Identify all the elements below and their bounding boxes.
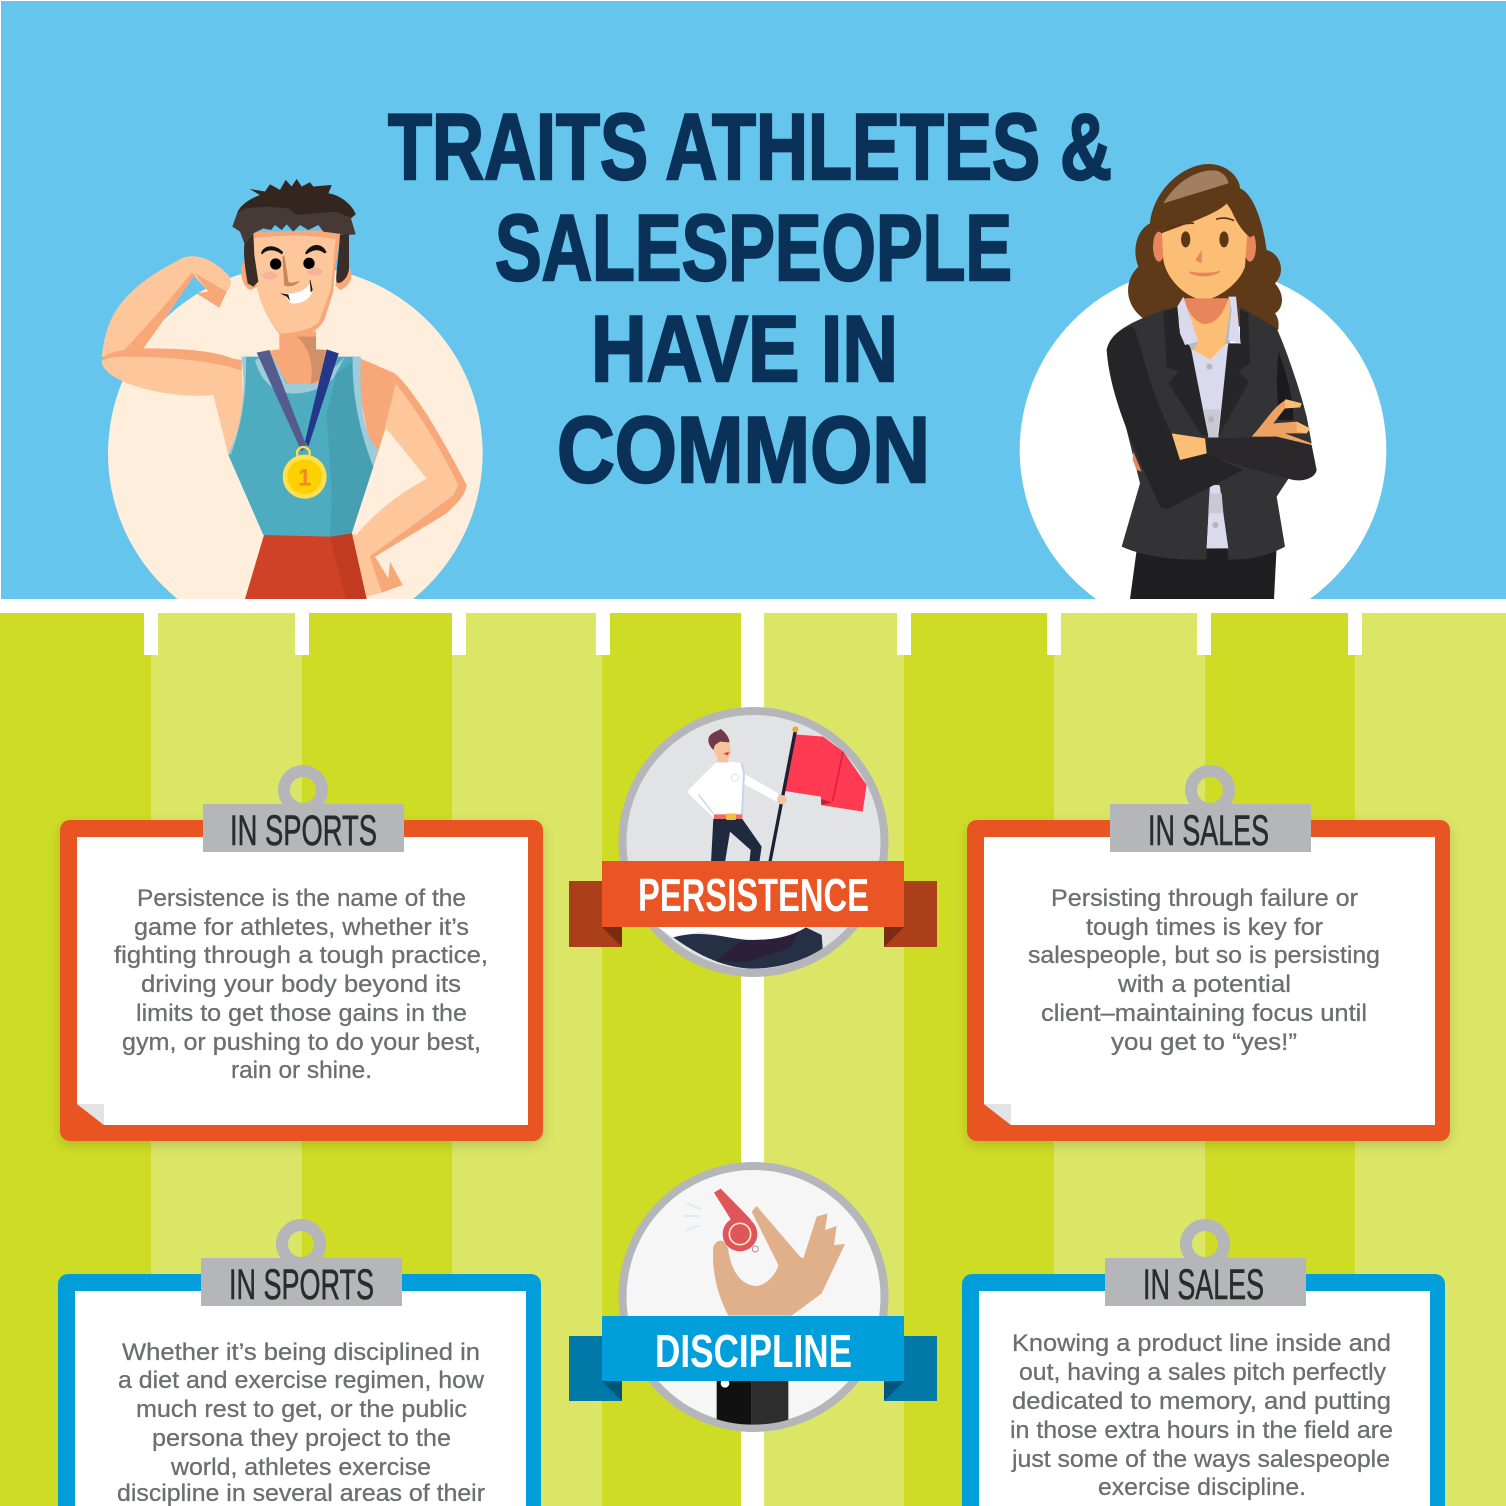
body text: Persistence is the name of the (137, 885, 466, 912)
athlete gold medal (283, 447, 327, 499)
athlete neck (269, 332, 327, 384)
ribbon tails (569, 881, 937, 947)
body text: persona they project to the (152, 1425, 451, 1452)
title: COMMON (557, 397, 930, 502)
sleeve (717, 1379, 788, 1425)
title (388, 94, 1112, 502)
body text: Persisting through failure or (1051, 885, 1358, 912)
face (252, 230, 342, 336)
icon: hand holding whistle (684, 1189, 845, 1425)
badge: persistence (569, 711, 937, 973)
card paper (75, 1291, 526, 1506)
clip tag (201, 1219, 402, 1309)
body text (1028, 885, 1380, 1056)
athlete shorts (245, 533, 367, 599)
body text: world, athletes exercise (170, 1454, 431, 1481)
flag (785, 734, 867, 812)
ribbon tails (569, 1336, 937, 1401)
panel: discipline in sports (58, 1219, 541, 1506)
body text (114, 885, 488, 1084)
badge: discipline (569, 1166, 937, 1428)
athlete raised arm (102, 256, 243, 455)
panel: persistence in sales (967, 765, 1450, 1141)
businesswoman lower shirt (1207, 485, 1228, 548)
businesswoman jacket (1107, 307, 1312, 560)
body text: gym, or pushing to do your best, (122, 1029, 481, 1056)
title: HAVE IN (591, 296, 898, 401)
title: TRAITS ATHLETES & (388, 94, 1112, 199)
paper fold (77, 1104, 104, 1125)
clip tag: IN SALES (1148, 807, 1269, 855)
whistle (714, 1189, 758, 1252)
clip tag: IN SPORTS (229, 1261, 374, 1309)
body text: game for athletes, whether it’s (134, 914, 469, 941)
body text: dedicated to memory, and putting (1012, 1388, 1391, 1415)
ribbon (602, 1316, 904, 1381)
body text: Whether it’s being disciplined in (122, 1339, 480, 1366)
body text: client–maintaining focus until (1041, 1000, 1367, 1027)
striped field background (0, 613, 1506, 1506)
clip tag: IN SALES (1143, 1261, 1264, 1309)
shirt (1191, 342, 1228, 437)
card frame (60, 820, 543, 1141)
paper fold (984, 1104, 1011, 1125)
card paper (979, 1291, 1430, 1506)
flag pole (768, 726, 798, 863)
athlete tank top (228, 352, 378, 537)
businesswoman skirt (1130, 547, 1277, 599)
trousers (711, 819, 762, 862)
nose (282, 255, 300, 286)
shirt (688, 761, 778, 818)
belt (714, 814, 742, 819)
body text (117, 1339, 485, 1506)
cheeks (262, 272, 278, 280)
businesswoman back hair (1128, 164, 1282, 330)
ribbon (602, 861, 904, 927)
lapels (1163, 307, 1208, 436)
body text: a diet and exercise regimen, how (118, 1367, 484, 1394)
badge circle (622, 1166, 884, 1428)
athlete backdrop circle (108, 270, 483, 599)
clip tag: IN SPORTS (230, 807, 377, 855)
ribbon label: PERSISTENCE (638, 869, 869, 921)
athlete right arm (352, 358, 467, 597)
athlete gold medal: 1 (298, 464, 311, 491)
eyes (270, 258, 281, 270)
body text: in those extra hours in the field are (1010, 1417, 1393, 1444)
clip tag (1110, 765, 1311, 855)
athlete medal ribbons (257, 349, 339, 452)
hand (713, 1206, 845, 1316)
panel: persistence in sports (60, 765, 543, 1141)
body text: much rest to get, or the public (136, 1396, 467, 1423)
card paper (984, 837, 1435, 1125)
title: SALESPEOPLE (495, 195, 1012, 300)
hand (777, 795, 787, 804)
businesswoman upper torso (1163, 297, 1293, 437)
body text: you get to “yes!” (1111, 1029, 1297, 1056)
card frame (967, 820, 1450, 1141)
body text: Knowing a product line inside and (1012, 1330, 1391, 1357)
card frame (58, 1274, 541, 1506)
panel: discipline in sales (962, 1219, 1445, 1506)
ears (241, 260, 258, 290)
body text: tough times is key for (1086, 914, 1323, 941)
card paper (77, 837, 528, 1125)
body text: fighting through a tough practice, (114, 942, 488, 969)
header background (1, 1, 1506, 599)
body text: with a potential (1117, 971, 1291, 998)
buttons (1206, 364, 1212, 370)
collar shadow (1225, 300, 1232, 344)
ribbon label: DISCIPLINE (655, 1325, 852, 1377)
man (688, 729, 787, 862)
body text: limits to get those gains in the (136, 1000, 467, 1027)
badge circle (622, 711, 884, 973)
icon: man planting flag (657, 726, 867, 969)
hair (232, 179, 356, 243)
smile (285, 282, 312, 303)
body text: driving your body beyond its (141, 971, 461, 998)
businesswoman face (1152, 170, 1263, 300)
sleeve shadow (1277, 352, 1293, 420)
body text: exercise discipline. (1098, 1474, 1306, 1501)
body text: rain or shine. (231, 1057, 372, 1084)
eyebrows (261, 246, 283, 254)
card frame (962, 1274, 1445, 1506)
collar (1177, 297, 1198, 345)
illustration: businesswoman (1020, 164, 1386, 633)
clip tag (1105, 1219, 1306, 1309)
body text (1010, 1330, 1393, 1501)
sound lines (684, 1203, 701, 1231)
illustration: athlete (102, 179, 483, 641)
neck (1184, 298, 1232, 360)
body text: salespeople, but so is persisting (1028, 942, 1380, 969)
athlete head (232, 179, 356, 336)
clip tag (203, 765, 404, 855)
businesswoman backdrop circle (1020, 282, 1386, 599)
body text: just some of the ways salespeople (1011, 1446, 1390, 1473)
head (713, 742, 731, 762)
businesswoman crossed arms (1107, 327, 1317, 509)
body text: out, having a sales pitch perfectly (1019, 1359, 1387, 1386)
man's foot and shoe (657, 927, 823, 969)
